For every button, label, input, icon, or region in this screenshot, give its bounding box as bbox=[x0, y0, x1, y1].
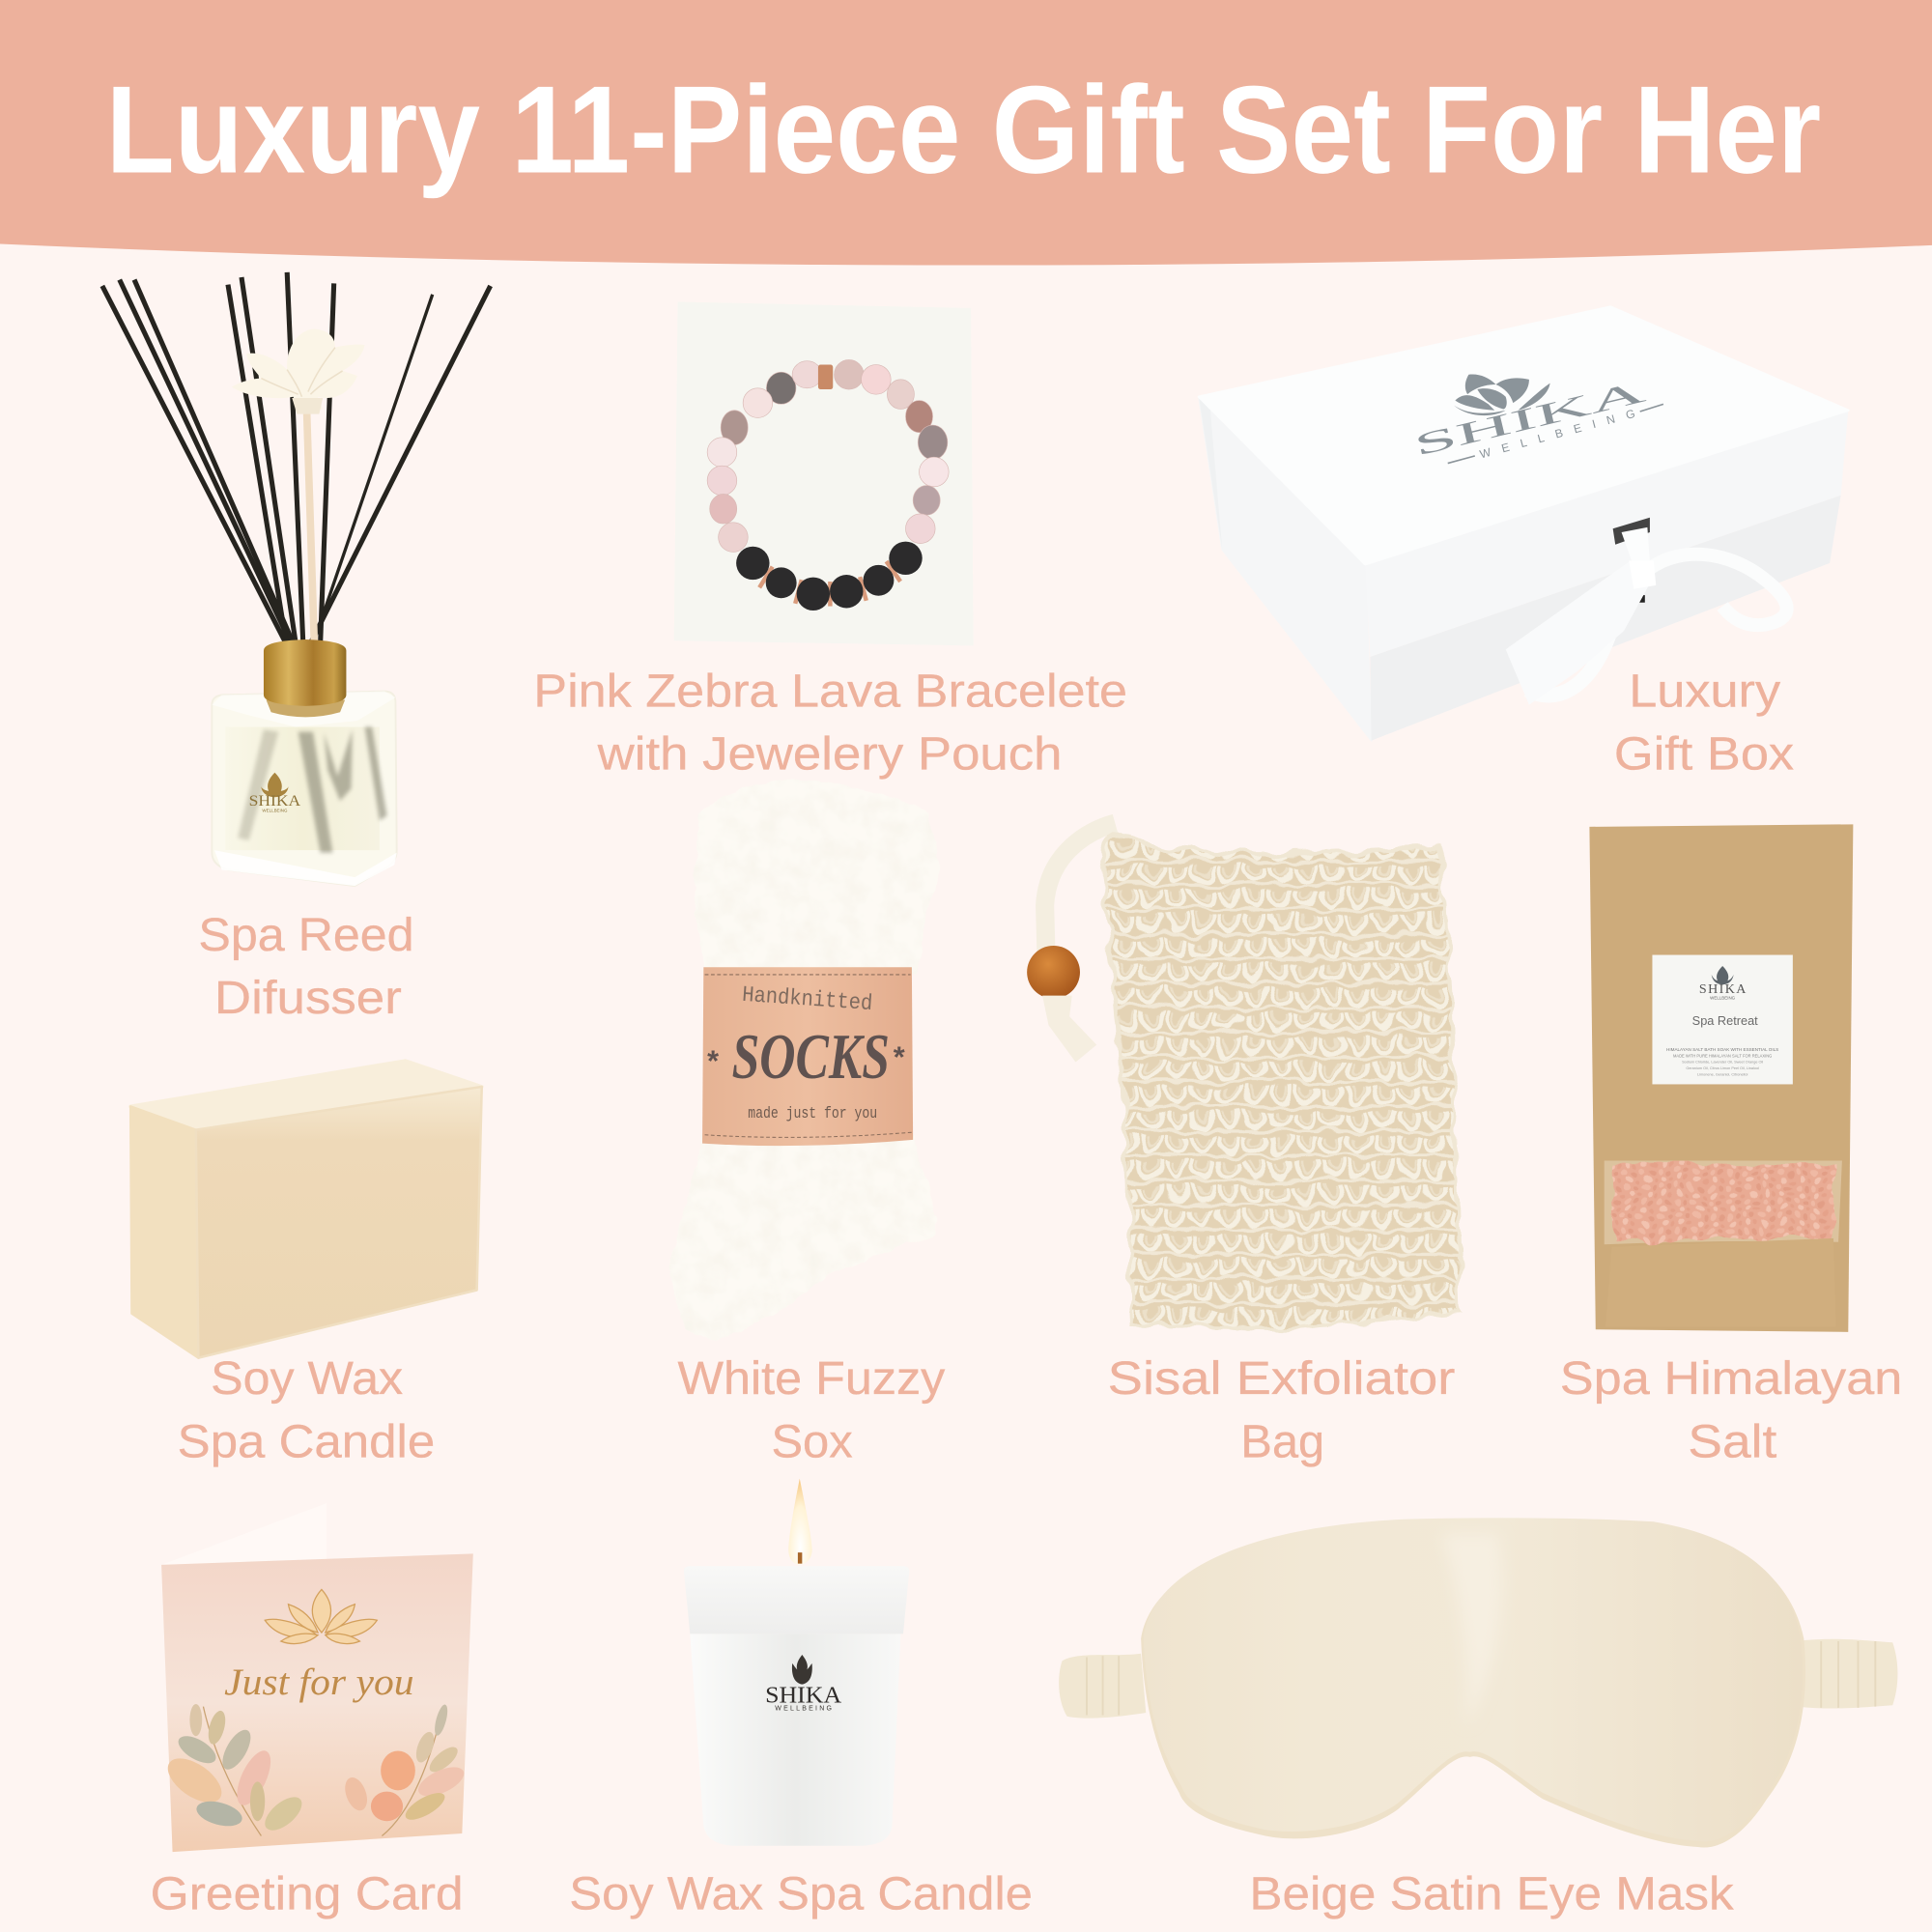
paper label: Sodium Chloride, Lavender Oil, Sweet Orange Oil bbox=[1682, 1061, 1763, 1065]
pink zebra beads bbox=[707, 359, 949, 552]
label: Spa Reed Difusser: Spa Reed bbox=[198, 909, 414, 961]
reeds bbox=[102, 272, 491, 643]
left loop bbox=[1528, 635, 1609, 696]
bag mesh bbox=[1100, 834, 1460, 1328]
sola flower bbox=[232, 329, 365, 414]
paper label: Geranium Oil, Citrus Limon Peel Oil, Linalool bbox=[1686, 1066, 1759, 1070]
product: sisal exfoliator bag bbox=[1027, 823, 1460, 1328]
lid top bbox=[1199, 307, 1848, 564]
candle logo: WELLBEING bbox=[775, 1705, 832, 1712]
paper label: Spa Retreat bbox=[1692, 1013, 1758, 1028]
pouch card bbox=[674, 301, 974, 645]
base front bbox=[1370, 496, 1841, 741]
paper label: SHIKA bbox=[1699, 981, 1747, 997]
box logo: WELLBEING bbox=[1478, 407, 1636, 461]
label: Soy Wax Spa Candle (second): Soy Wax Spa Candle bbox=[569, 1867, 1033, 1919]
label: Luxury Gift Box: Gift Box bbox=[1614, 728, 1794, 781]
product: satin eye mask bbox=[1059, 1518, 1897, 1847]
label: White Fuzzy Sox: White Fuzzy bbox=[678, 1352, 946, 1405]
product: himalayan salt pouch bbox=[1589, 824, 1853, 1332]
candle logo bbox=[765, 1655, 842, 1712]
lotus emblem bbox=[265, 1589, 377, 1644]
label: Sisal Exfoliator Bag bbox=[1108, 1352, 1455, 1467]
band text bbox=[707, 982, 905, 1122]
tassel bbox=[1042, 996, 1096, 1062]
paper label: Limonene, Geraniol, Citronellol bbox=[1697, 1073, 1747, 1077]
left strap bbox=[1059, 1654, 1146, 1719]
label: Spa Himalayan Salt bbox=[1560, 1352, 1902, 1467]
product: white candle bbox=[684, 1479, 909, 1846]
band text: * bbox=[894, 1041, 905, 1074]
product: greeting card bbox=[160, 1503, 473, 1852]
label: bracelet: Pink Zebra Lava Bracelete bbox=[533, 666, 1127, 718]
right flowers and leaves bbox=[341, 1703, 469, 1836]
copper rings bbox=[757, 560, 902, 607]
wooden bead bbox=[1027, 946, 1080, 999]
paper band bbox=[702, 967, 913, 1146]
label: bracelet: with Jewelery Pouch bbox=[597, 728, 1062, 781]
label: Spa Reed Difusser: Difusser bbox=[214, 972, 402, 1024]
product: reed diffuser bbox=[102, 272, 491, 886]
right strap bbox=[1797, 1639, 1897, 1709]
bottle logo: WELLBEING bbox=[262, 809, 288, 813]
drawstring bbox=[1045, 823, 1115, 952]
ribbon strap and knot bbox=[1622, 527, 1651, 579]
rose gold spacer bbox=[818, 365, 833, 389]
bottle logo bbox=[249, 773, 300, 813]
paper label: HIMALAYAN SALT BATH SOAK WITH ESSENTIAL OILS bbox=[1666, 1047, 1778, 1052]
label: Soy Wax Spa Candle bbox=[178, 1352, 435, 1467]
ribbon slots bbox=[1613, 518, 1650, 545]
label: Luxury Gift Box bbox=[1614, 666, 1794, 781]
lower flap bbox=[1605, 1238, 1836, 1327]
lid front bbox=[1365, 411, 1848, 657]
box logo: SHIKA bbox=[1410, 375, 1649, 463]
candle body bbox=[690, 1634, 900, 1846]
white satin ribbon bbox=[1506, 527, 1787, 705]
box logo bbox=[1410, 375, 1663, 464]
label: Luxury Gift Box: Luxury bbox=[1629, 666, 1781, 718]
label: Spa Himalayan Salt: Salt bbox=[1688, 1415, 1777, 1467]
window with salt bbox=[1605, 1161, 1842, 1244]
left tail bbox=[1506, 562, 1654, 705]
label: Soy Wax Spa Candle: Spa Candle bbox=[178, 1415, 435, 1467]
flame bbox=[788, 1479, 812, 1565]
sock fabric bbox=[670, 780, 938, 1341]
inner reed reflections bbox=[238, 727, 387, 853]
paper label: MADE WITH PURE HIMALAYAN SALT FOR RELAXING bbox=[1673, 1053, 1772, 1058]
product: luxury gift box bbox=[1199, 307, 1848, 741]
paper label: WELLBEING bbox=[1710, 995, 1736, 1000]
label: White Fuzzy Sox bbox=[678, 1352, 946, 1467]
paper label bbox=[1652, 955, 1793, 1084]
product: fuzzy socks bbox=[670, 780, 938, 1341]
lava beads bbox=[736, 542, 923, 611]
card script: Just for you bbox=[224, 1661, 414, 1703]
card front bbox=[161, 1553, 473, 1852]
label: bracelet bbox=[533, 666, 1127, 781]
mask front bbox=[1144, 1518, 1803, 1841]
product: bracelet on card bbox=[674, 301, 974, 645]
band text: SOCKS bbox=[732, 1022, 890, 1093]
satin sheen bbox=[1441, 1534, 1502, 1725]
product: soap bar bbox=[130, 1061, 482, 1358]
gold collar and cap bbox=[267, 699, 345, 717]
band text: made just for you bbox=[748, 1104, 877, 1122]
card back flap bbox=[161, 1503, 327, 1565]
candle logo: SHIKA bbox=[765, 1683, 842, 1709]
label: Greeting Card: Greeting Card bbox=[151, 1867, 464, 1919]
band text: Handknitted bbox=[741, 982, 873, 1016]
label: Beige Satin Eye Mask: Beige Satin Eye Mask bbox=[1249, 1867, 1734, 1919]
label: Sisal Exfoliator Bag: Sisal Exfoliator bbox=[1108, 1352, 1455, 1405]
left leaves bbox=[160, 1704, 307, 1836]
glass bottle bbox=[212, 692, 397, 886]
natural stick bbox=[307, 412, 314, 640]
right loop bbox=[1649, 554, 1787, 625]
label: Soy Wax Spa Candle: Soy Wax bbox=[211, 1352, 403, 1405]
frosted top bbox=[684, 1566, 909, 1634]
mask back edge bbox=[1141, 1520, 1805, 1847]
band text: * bbox=[707, 1044, 719, 1077]
bottle logo: SHIKA bbox=[249, 793, 300, 810]
label: Sisal Exfoliator Bag: Bag bbox=[1240, 1415, 1324, 1467]
header banner bbox=[0, 0, 1932, 266]
label: White Fuzzy Sox: Sox bbox=[771, 1415, 853, 1467]
label: Spa Reed Difusser bbox=[198, 909, 414, 1024]
left side bbox=[1199, 397, 1372, 741]
label: Spa Himalayan Salt: Spa Himalayan bbox=[1560, 1352, 1902, 1405]
kraft bag bbox=[1589, 824, 1853, 1332]
